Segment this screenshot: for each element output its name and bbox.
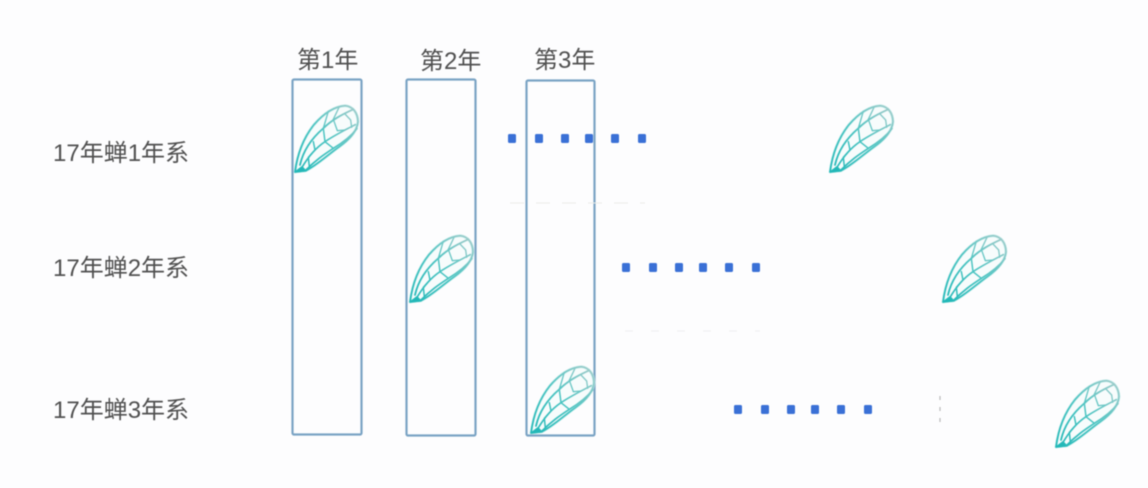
icon: wing, brood 1 year 17: [830, 106, 893, 172]
dotted timeline: brood 1: [508, 134, 646, 143]
row label: brood 3: 17年蝉3年系: [53, 397, 189, 424]
icon: wing, brood 3 year 19: [1056, 381, 1119, 447]
heading: year 2: 第2年: [420, 48, 481, 75]
dotted timeline: brood 3: [734, 405, 872, 414]
heading: year 3: 第3年: [534, 47, 595, 74]
column box: year 2: [406, 80, 476, 436]
heading: year 1: 第1年: [297, 47, 358, 74]
row label: brood 1: 17年蝉1年系: [53, 140, 189, 167]
dotted timeline: brood 2: [622, 263, 760, 272]
icon: wing, brood 2 year 2: [410, 236, 473, 302]
column box: year 3: [526, 80, 594, 436]
icon: wing, brood 2 year 18: [943, 236, 1006, 302]
icon: wing, brood 3 year 3: [531, 367, 594, 433]
column box: year 1: [292, 80, 362, 434]
icon: wing, brood 1 year 1: [295, 106, 358, 172]
row label: brood 2: 17年蝉2年系: [53, 255, 189, 282]
